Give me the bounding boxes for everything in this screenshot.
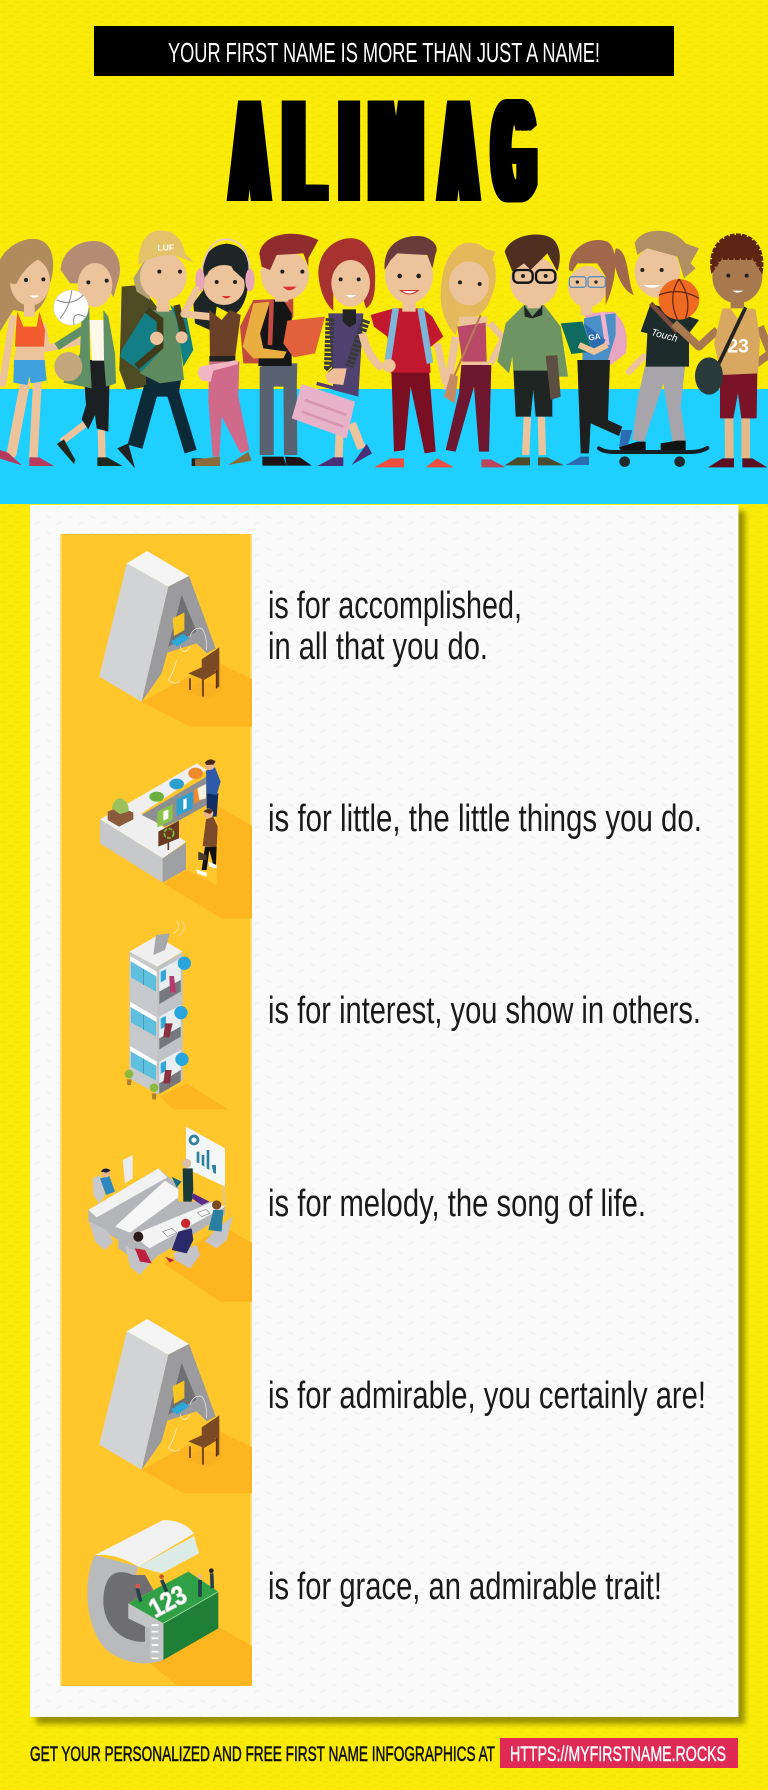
student 10: ponytail, tablet and pink backpack: GA xyxy=(588,332,601,343)
icon: isometric letter A xyxy=(99,1319,253,1493)
icon: isometric letter G with green block xyxy=(87,1520,253,1687)
icon: isometric letter L recycling counter xyxy=(100,759,253,918)
title: name: A xyxy=(442,69,475,232)
student 8: blonde with shoulder bag xyxy=(441,243,506,467)
student 3: hiker with backpack xyxy=(117,230,220,468)
footer call to action: GET YOUR PERSONALIZED AND FREE FIRST NAME INFOGRAPHICS AT xyxy=(30,1743,495,1766)
icon: isometric letter M meeting table xyxy=(88,1127,253,1302)
footer url button xyxy=(500,1738,738,1768)
title: name: I xyxy=(342,69,356,232)
student 11: skateboarder with basketball: Touch xyxy=(650,327,679,345)
student 5: reading a book xyxy=(240,234,325,466)
student 12: curly hair and tank top xyxy=(674,235,768,467)
title: name xyxy=(226,69,538,232)
student 6: red bob with pink bag xyxy=(292,238,375,466)
orange illustration column xyxy=(60,534,252,1686)
student 1: orange top xyxy=(0,239,78,466)
student 3: hiker with backpack: LUF xyxy=(157,243,174,253)
statement A xyxy=(268,585,522,668)
student 4: headphones and pink pants xyxy=(184,239,255,466)
icon: isometric letter A xyxy=(99,551,253,727)
cyan floor band xyxy=(0,389,768,504)
statement A: in all that you do. xyxy=(268,626,488,668)
title: name: A xyxy=(232,69,266,232)
student 11: skateboarder with basketball xyxy=(599,231,707,467)
statements xyxy=(268,585,706,1608)
statement A: is for accomplished, xyxy=(268,585,522,627)
statement G: is for grace, an admirable trait! xyxy=(268,1566,662,1608)
title: name: M xyxy=(371,69,421,232)
statement M: is for melody, the song of life. xyxy=(268,1183,646,1225)
student 9: glasses and green sweater xyxy=(497,234,568,465)
group of twelve students xyxy=(0,230,768,468)
icon: isometric letter I tower xyxy=(125,921,228,1109)
student 10: ponytail, tablet and pink backpack xyxy=(561,240,634,465)
student 2: green jacket with volleyball xyxy=(54,241,123,466)
title: name: G xyxy=(495,69,533,232)
title: name: L xyxy=(285,69,323,232)
tagline banner xyxy=(94,26,674,76)
student 7: red shirt and backpack straps xyxy=(362,236,454,467)
icon: isometric letter G with green block: 123 xyxy=(144,1579,192,1624)
panel shadow xyxy=(36,511,745,1724)
student 12: curly hair and tank top: 23 xyxy=(727,337,749,358)
white content panel xyxy=(30,505,738,1717)
